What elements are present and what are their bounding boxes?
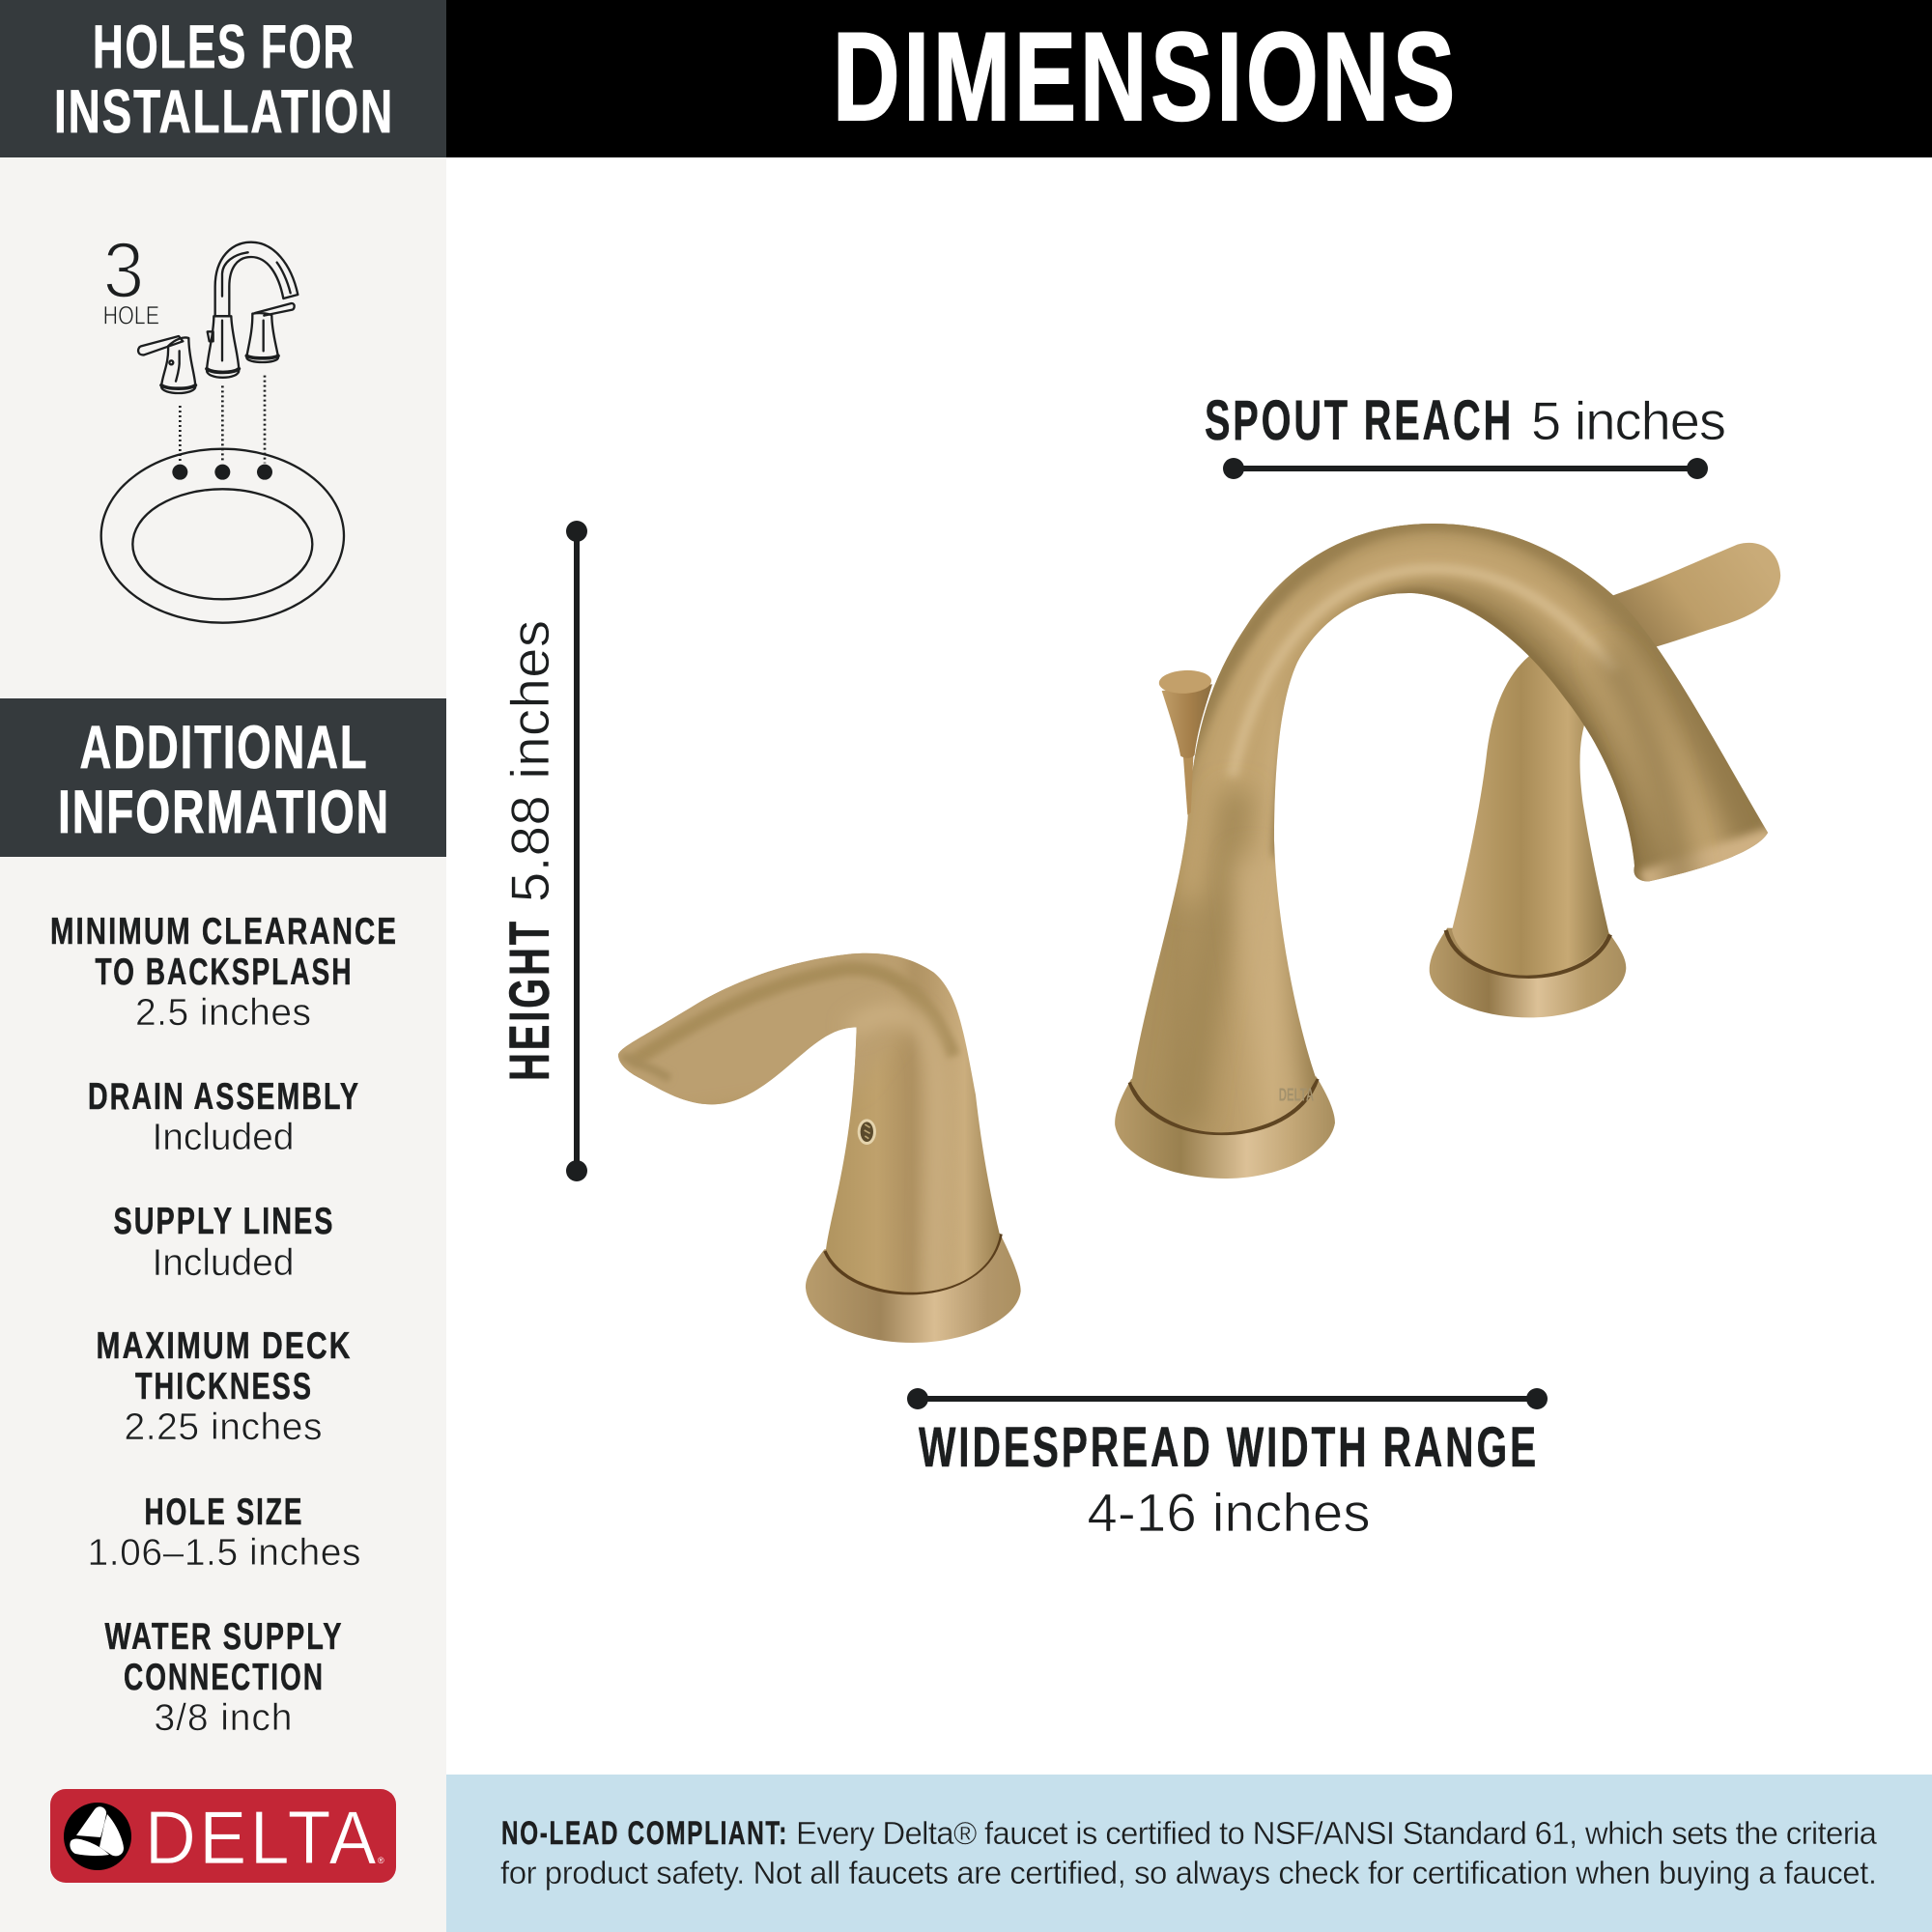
spec: hole size: HOLE SIZE [145,1492,303,1533]
spec: supply lines: SUPPLY LINES [114,1201,334,1242]
rear base flange [1430,928,1626,1017]
photo: left handle [618,952,1021,1343]
spec: minimum clearance: MINIMUM CLEARANCE [50,911,398,952]
panel: left sidebar [0,0,446,1932]
heading: holes for installation [0,0,446,157]
spec: drain assembly [88,1076,360,1158]
front base flange [1115,1076,1335,1179]
logo: Delta [50,1789,396,1883]
panel: no-lead compliant note: Every Delta® faucet is certified to NSF/ANSI Standard 61, which sets the criteria [796,1815,1878,1851]
brand mark on faucet base: DELTA [1279,1085,1314,1105]
spec: supply lines [114,1201,334,1284]
spec: hole size: 1.06–1.5 inches [87,1532,361,1574]
left handle flange [806,1234,1021,1343]
rear handle lever [1606,543,1780,648]
icon: left handle outline [138,336,195,393]
drain lift rod [1158,669,1212,815]
heading: additional information: INFORMATION [58,779,390,846]
spec: water supply connection: 3/8 inch [155,1697,292,1739]
dimension: height: 5.88 inches [499,620,560,902]
title: dimensions: DIMENSIONS [833,6,1459,147]
dimension: widespread width range: 4-16 inches [1088,1482,1370,1543]
dimension: widespread width range [907,1388,1548,1543]
heading: holes for installation: INSTALLATION [54,78,394,146]
arch shading [1208,557,1719,901]
logo: Delta: DELTA [145,1795,380,1880]
icon: dotted guide lines [180,376,265,463]
panel: no-lead compliant note: NO-LEAD COMPLIANT: [501,1815,788,1852]
icon: sink basin [101,449,344,623]
spec: water supply connection: WATER SUPPLY [104,1616,344,1658]
spout body [1131,524,1768,1132]
dimension: widespread width range: WIDESPREAD WIDTH RANGE [919,1416,1539,1479]
icon: mounting holes [172,465,272,480]
icon: three hole sink installation diagram [101,227,344,623]
dimension: height [498,521,587,1181]
dimension: spout reach: 5 inches [1531,390,1726,451]
heading: holes for installation: HOLES FOR [93,14,355,81]
dimension: spout reach: SPOUT REACH [1205,389,1514,452]
spec: maximum deck thickness: 2.25 inches [124,1406,323,1448]
spec: hole size [87,1492,361,1574]
set screw hole [858,1119,876,1145]
photo: main faucet with rear handle [1115,524,1781,1179]
spec: supply lines: Included [153,1242,294,1284]
body tone [1185,790,1236,1123]
spec: minimum clearance: 2.5 inches [135,992,311,1034]
panel: no-lead compliant note [446,1775,1932,1932]
label: 3 hole [103,227,159,330]
spec: maximum deck thickness [97,1325,352,1448]
spec: drain assembly: Included [153,1117,294,1158]
spec: maximum deck thickness: MAXIMUM DECK [97,1325,352,1367]
logo: Delta: ® [378,1856,384,1865]
heading: additional information: ADDITIONAL [79,714,369,781]
spec: minimum clearance: TO BACKSPLASH [95,952,354,993]
lever tone [618,952,912,1105]
spec: water supply connection: CONNECTION [124,1657,325,1698]
label: 3 hole: HOLE [103,301,159,330]
icon: right handle outline [246,303,295,362]
spec: water supply connection [104,1616,344,1739]
label: 3 hole: 3 [103,227,144,315]
spec: drain assembly: DRAIN ASSEMBLY [88,1076,360,1118]
panel: no-lead compliant note: for product safety. Not all faucets are certified, so always check for certification when buying a faucet. [500,1855,1877,1890]
spec: minimum clearance [50,911,398,1034]
spec: maximum deck thickness: THICKNESS [135,1366,313,1407]
dimension: height: HEIGHT [498,919,561,1081]
title: dimensions [446,0,1932,157]
icon: centre spout outline [207,242,298,378]
left handle body [618,952,1000,1293]
dimension: spout reach [1205,389,1726,479]
rear post [1452,648,1649,976]
heading: additional information [0,698,446,857]
